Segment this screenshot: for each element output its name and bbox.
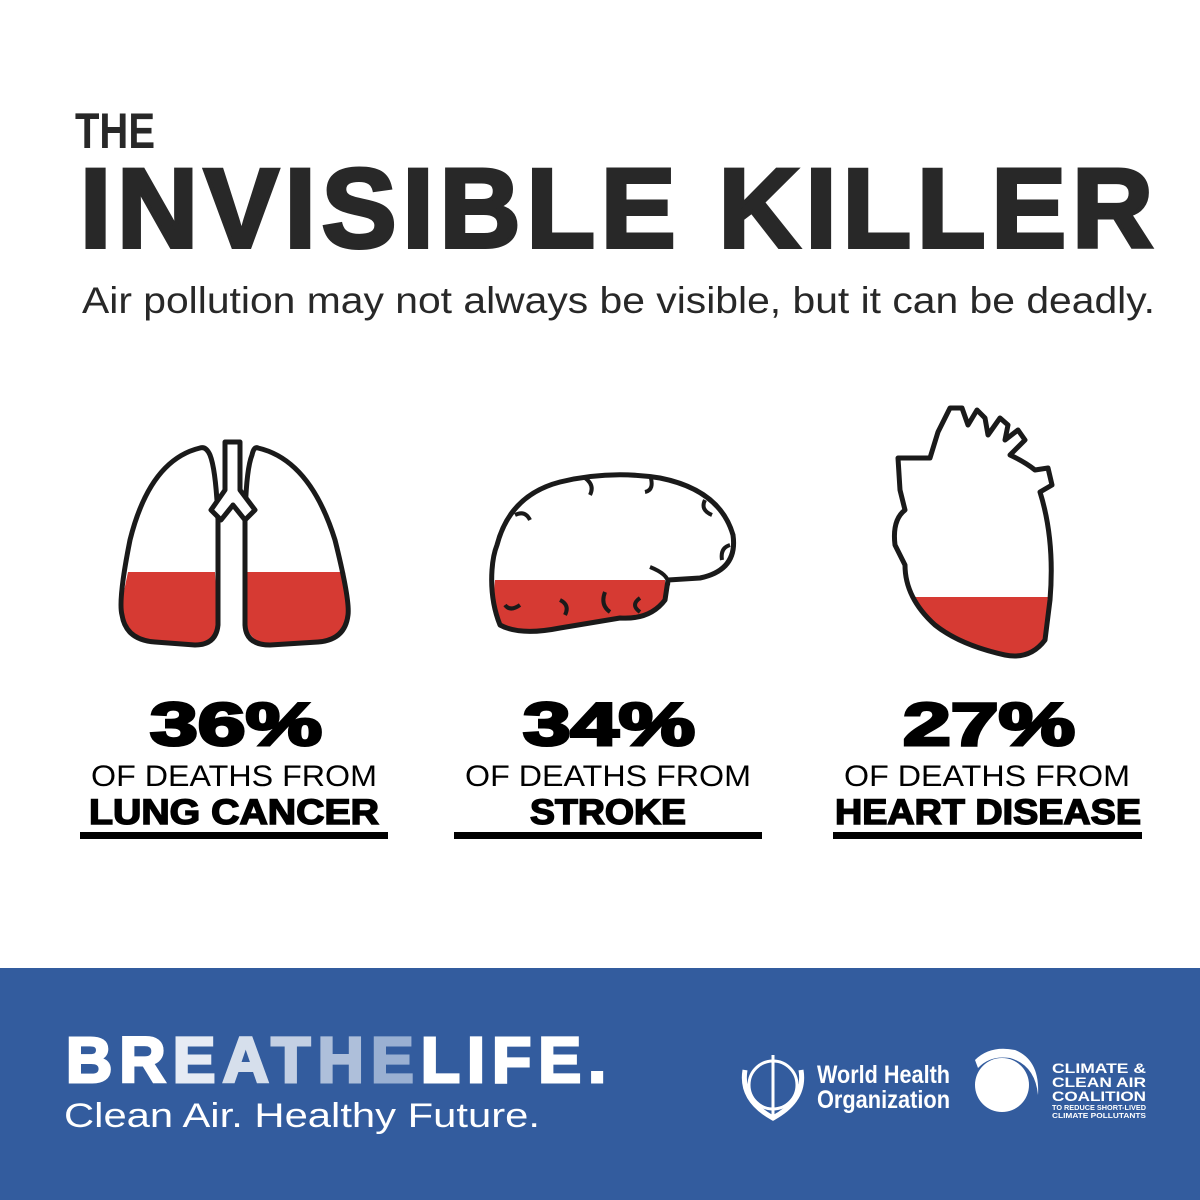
CCAC text: CLEAN AIR bbox=[1052, 1074, 1146, 1090]
CCAC text: CLIMATE & bbox=[1052, 1060, 1146, 1076]
WHO text bbox=[817, 1061, 950, 1114]
stat: lung cancer: LUNG CANCER bbox=[89, 793, 379, 832]
CCAC text: CLIMATE POLLUTANTS bbox=[1052, 1113, 1146, 1120]
CCAC text bbox=[1052, 1060, 1146, 1120]
title: INVISIBLE KILLER bbox=[80, 146, 1153, 271]
stat: lung cancer bbox=[80, 691, 388, 839]
WHO text: World Health bbox=[817, 1061, 950, 1089]
icon: heart bbox=[894, 408, 1052, 656]
icon: CCAC globe bbox=[975, 1049, 1038, 1112]
stat: heart disease: OF DEATHS FROM bbox=[844, 760, 1130, 793]
stat: heart disease: 27% bbox=[903, 691, 1075, 758]
stat: heart disease: HEART DISEASE bbox=[835, 793, 1141, 832]
stat: stroke: OF DEATHS FROM bbox=[465, 760, 751, 793]
icon: lungs bbox=[120, 442, 350, 645]
stat: stroke bbox=[454, 691, 762, 839]
stat: lung cancer: 36% bbox=[150, 691, 322, 758]
icon: brain bbox=[492, 475, 734, 631]
icon: WHO emblem bbox=[744, 1055, 802, 1118]
WHO text: Organization bbox=[817, 1086, 950, 1114]
CCAC text: COALITION bbox=[1052, 1088, 1146, 1104]
stat: lung cancer: OF DEATHS FROM bbox=[91, 760, 377, 793]
CCAC text: TO REDUCE SHORT-LIVED bbox=[1052, 1105, 1146, 1112]
subtitle: Air pollution may not always be visible, but it can be deadly. bbox=[82, 280, 1155, 321]
stat: heart disease bbox=[833, 691, 1142, 839]
stat: stroke: 34% bbox=[523, 691, 695, 758]
stat: stroke: STROKE bbox=[530, 793, 686, 832]
footer bbox=[0, 968, 1200, 1200]
tagline: Clean Air. Healthy Future. bbox=[64, 1097, 540, 1135]
title: THE bbox=[75, 103, 155, 159]
breathelife logo: BREATHELIFE. bbox=[66, 1024, 606, 1096]
